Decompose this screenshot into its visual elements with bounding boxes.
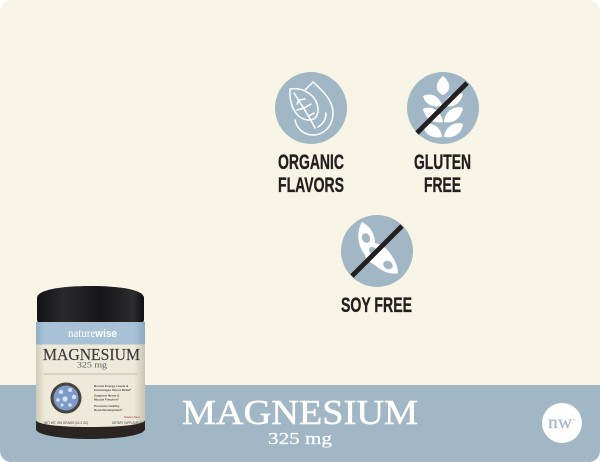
- label: gluten free: GLUTEN: [414, 151, 471, 174]
- magnesium dish: [50, 382, 82, 414]
- net weight text: NET WT. 294 GRAMS (10.3 OZ): [44, 421, 88, 425]
- benefit text: Muscle Function*: [94, 398, 120, 402]
- icon: organic flavors leaf and drop: [275, 72, 347, 144]
- jar label: [36, 322, 145, 428]
- jar title: MAGNESIUM: [43, 345, 140, 364]
- band title: MAGNESIUM: [182, 394, 418, 432]
- logo badge: [542, 403, 582, 443]
- label: gluten free: FREE: [424, 174, 461, 197]
- supplement text: DIETARY SUPPLEMENT: [112, 421, 142, 425]
- jar lid: [37, 286, 144, 325]
- icon: soy free bean pod: [341, 215, 413, 287]
- bottom band: [0, 385, 600, 462]
- benefit text: Supports Nerve &: [94, 394, 120, 398]
- jar base: [36, 415, 145, 439]
- flavor tag: Strawberry Flavor: [124, 415, 140, 419]
- label: organic flavors: [278, 151, 344, 197]
- jar dose: 325 mg: [77, 360, 108, 370]
- label: gluten free: [414, 151, 471, 197]
- logo badge: nw: [548, 412, 572, 432]
- label: soy free: SOY FREE: [341, 294, 412, 317]
- brand name: naturewise: [68, 326, 117, 340]
- benefit text: Bone Development*: [94, 408, 123, 412]
- label: organic flavors: FLAVORS: [278, 174, 344, 197]
- product jar: [36, 286, 145, 439]
- benefit text: Promotes Healthy: [94, 404, 120, 408]
- benefit text: Boosts Energy Levels &: [94, 384, 129, 388]
- band dose: 325 mg: [268, 429, 333, 448]
- benefit text: Encourages Stress Relief*: [94, 388, 132, 392]
- icon: gluten free wheat: [407, 72, 479, 144]
- label: organic flavors: ORGANIC: [278, 151, 344, 174]
- benefit text: [94, 384, 132, 412]
